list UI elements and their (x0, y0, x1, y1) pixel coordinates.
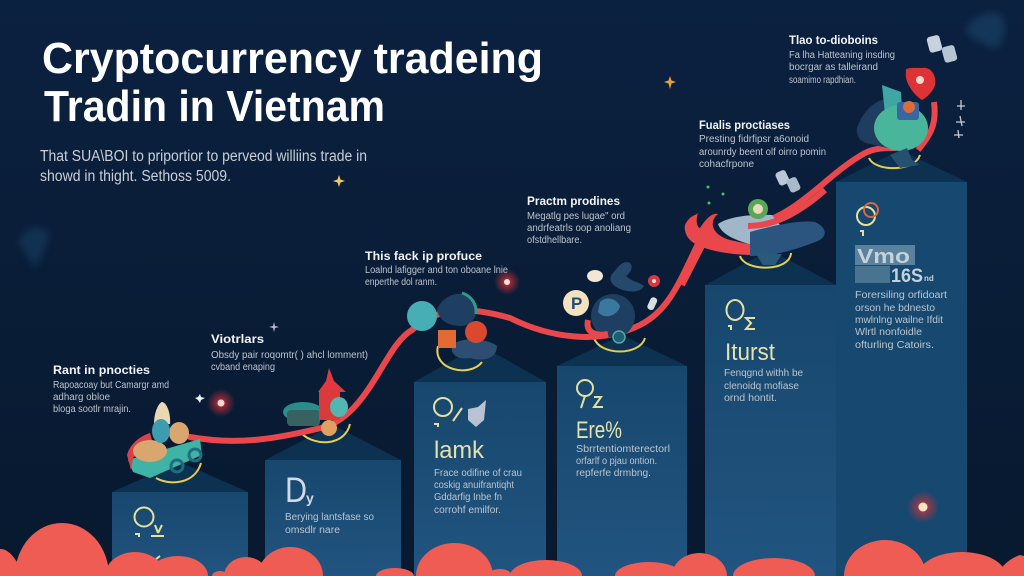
label 6: bocrgar as talleirand (789, 62, 878, 73)
label 6: soamimo rapdhian. (789, 75, 856, 86)
icon: gold star (333, 175, 345, 187)
bar 4 (557, 335, 687, 576)
label 4: Practm prodines (527, 196, 620, 208)
glowing dot 2 (494, 269, 520, 295)
label 4 (527, 196, 631, 246)
bar 4 text: Sbrrtentiomterectorl (576, 444, 670, 455)
label 5: Fualis proctiases (699, 120, 790, 132)
icon: dice top (926, 34, 958, 63)
icon: white sparkle (195, 394, 205, 403)
title: Tradin in Vietnam (44, 82, 385, 131)
bar 2 text: omsdlr nare (285, 525, 341, 536)
label 2: cvband enaping (211, 362, 275, 373)
bar 6 text: orson he bdnesto (855, 303, 936, 314)
bar 4 text: orfarlf o pjau ontion. (576, 456, 657, 467)
subtitle: showd in thight. Sethoss 5009. (40, 168, 231, 185)
label 5: arounrdy beent olf oirro pomin (699, 147, 826, 158)
label 6 (789, 35, 895, 86)
label 3 (365, 251, 509, 288)
icon: gear cluster (407, 293, 497, 360)
rising ribbon (190, 240, 700, 441)
label 4: andrfeatrls oop anoliang (527, 223, 631, 234)
bar 5 text: clenoidq mofiase (724, 381, 800, 392)
icon: ring glyph 6 (857, 203, 878, 236)
label 2: Viotrlars (211, 334, 264, 346)
value boxes: nd (924, 274, 934, 283)
icon: ring glyph 3 (434, 398, 462, 427)
bar 2 text: Berying lantsfase so (285, 512, 375, 523)
bar 3 (414, 345, 546, 576)
bar 5 text: Fenqgnd withh be (724, 368, 804, 379)
value boxes (855, 245, 934, 287)
icon: red pagoda machine (283, 368, 348, 436)
label 6: Tlao to-dioboins (789, 35, 878, 47)
label 5: cohacfrpone (699, 159, 755, 170)
subtitle (40, 148, 367, 185)
icon: coin cart (127, 402, 202, 478)
bar 4 text (576, 444, 670, 479)
label 3: This fack ip profuce (365, 251, 482, 263)
bar 3 text: Gddarfig Inbe fn (434, 492, 502, 503)
label 5 (699, 120, 826, 170)
coral clouds (0, 523, 1024, 576)
value: Ere% (576, 417, 622, 444)
value: Iturst (725, 339, 775, 366)
icon: ring glyph 4 (577, 380, 603, 408)
label 4: ofstdhellbare. (527, 235, 582, 246)
decorative blob: left (18, 227, 50, 268)
bar 4 text: repferfe drmbng. (576, 468, 651, 479)
label 5: Presting fidrfipsr a6onoid (699, 134, 809, 145)
icon: ring glyph 1 (134, 508, 164, 560)
glowing dot 1 (207, 389, 235, 417)
icon: crystal (468, 400, 486, 427)
bar 6 (836, 150, 967, 576)
subtitle: That SUA\BOI to priportior to perveod williins trade in (40, 148, 367, 165)
label 4: Megatlg pes lugae" ord (527, 211, 625, 222)
bar 5 (705, 250, 836, 576)
value boxes: Vmo (857, 246, 910, 268)
bar 3 text (434, 468, 522, 516)
icon: violet sparkle (269, 322, 279, 332)
label 2: Obsdy pair roqomtr( ) ahcl lomment) (211, 350, 368, 361)
title: Cryptocurrency tradeing (42, 34, 543, 83)
title (42, 34, 543, 131)
ribbon tail to heart (918, 102, 935, 150)
bar 1 (112, 462, 248, 576)
bar 6 text (855, 290, 947, 351)
bar 6 text: mwlnlng wailne Ifdit (855, 315, 943, 326)
small y: y (306, 490, 314, 506)
bar 2 (265, 425, 401, 576)
label 1: adharg obloe (53, 392, 111, 403)
value boxes: 16S (891, 266, 923, 287)
bar 6 text: Wlrtl nonfoidle (855, 327, 923, 338)
value: lamk (434, 437, 485, 464)
label 6: Fa lha Hatteaning insding (789, 50, 895, 61)
decorative blob: top right (966, 13, 1004, 48)
glyph D: D (285, 471, 307, 510)
bar 5 text (724, 368, 804, 404)
icon: teal mascot and heart (857, 68, 935, 168)
bar 6 text: Forersiling orfidoart (855, 290, 947, 301)
label 1 (53, 365, 169, 415)
label 1: Rant in pnocties (53, 365, 150, 377)
label 3: enperthe dol ranm. (365, 277, 437, 288)
icon: coins and robot (563, 262, 660, 343)
bar 3 text: Frace odifine of crau (434, 468, 522, 479)
ribbon upper segment (750, 148, 895, 226)
yellow base rings (156, 155, 920, 482)
glowing dot 3 (907, 491, 939, 523)
bar 5 text: ornd hontit. (724, 393, 777, 404)
label 1: Rapoacoay but Camargr amd (53, 380, 169, 391)
icon: red wave and dark board (682, 186, 825, 285)
label 3: Loalnd lafigger and ton oboane lnie (365, 265, 509, 276)
icon: coins and robot: P (571, 294, 582, 313)
bar 3 text: corrohf emilfor. (434, 505, 501, 516)
icon: dice small (775, 169, 801, 193)
bar 3 text: coskig anuifrantiqht (434, 480, 514, 491)
bar 6 text: ofturling Catoirs. (855, 340, 934, 351)
bar 2 text (285, 512, 375, 536)
label 1: bloga sootlr mrajin. (53, 404, 131, 415)
icon: small white arrows (954, 100, 965, 138)
icon: orange star (664, 76, 676, 89)
icon: ring glyph 5 (726, 300, 755, 330)
label 2 (211, 334, 368, 373)
